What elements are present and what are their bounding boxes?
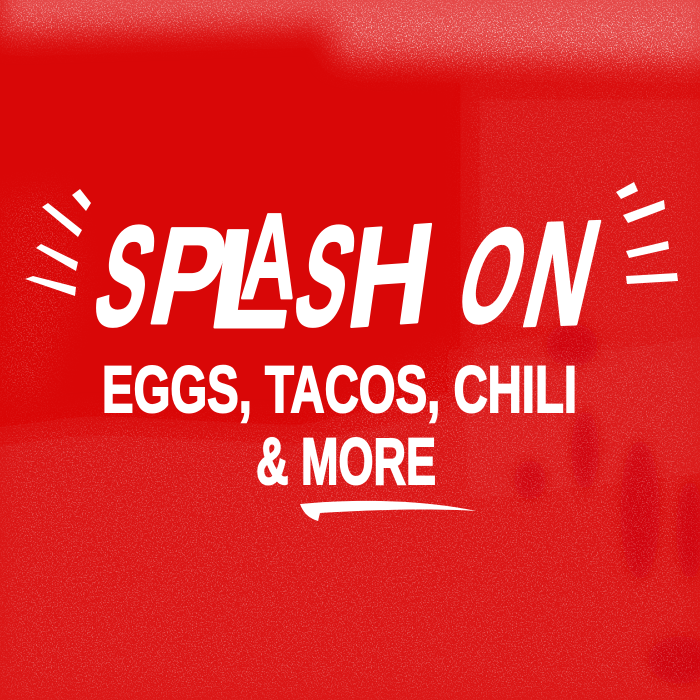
- right burst rays: [616, 182, 678, 284]
- heading: splash on: S: [81, 196, 170, 356]
- subheading: and more: & MORE: [256, 424, 436, 498]
- underline brush stroke: [300, 501, 476, 521]
- heading: splash on: O: [443, 201, 543, 351]
- left burst rays: [25, 189, 91, 296]
- heading: splash on: A: [238, 190, 303, 324]
- heading: splash on: P: [139, 198, 239, 352]
- heading: splash on: N: [511, 189, 614, 358]
- heading: splash on: L: [202, 202, 305, 358]
- heading: splash on: H: [340, 195, 443, 358]
- heading: splash on: S: [281, 196, 370, 356]
- heading: splash on: [81, 189, 614, 358]
